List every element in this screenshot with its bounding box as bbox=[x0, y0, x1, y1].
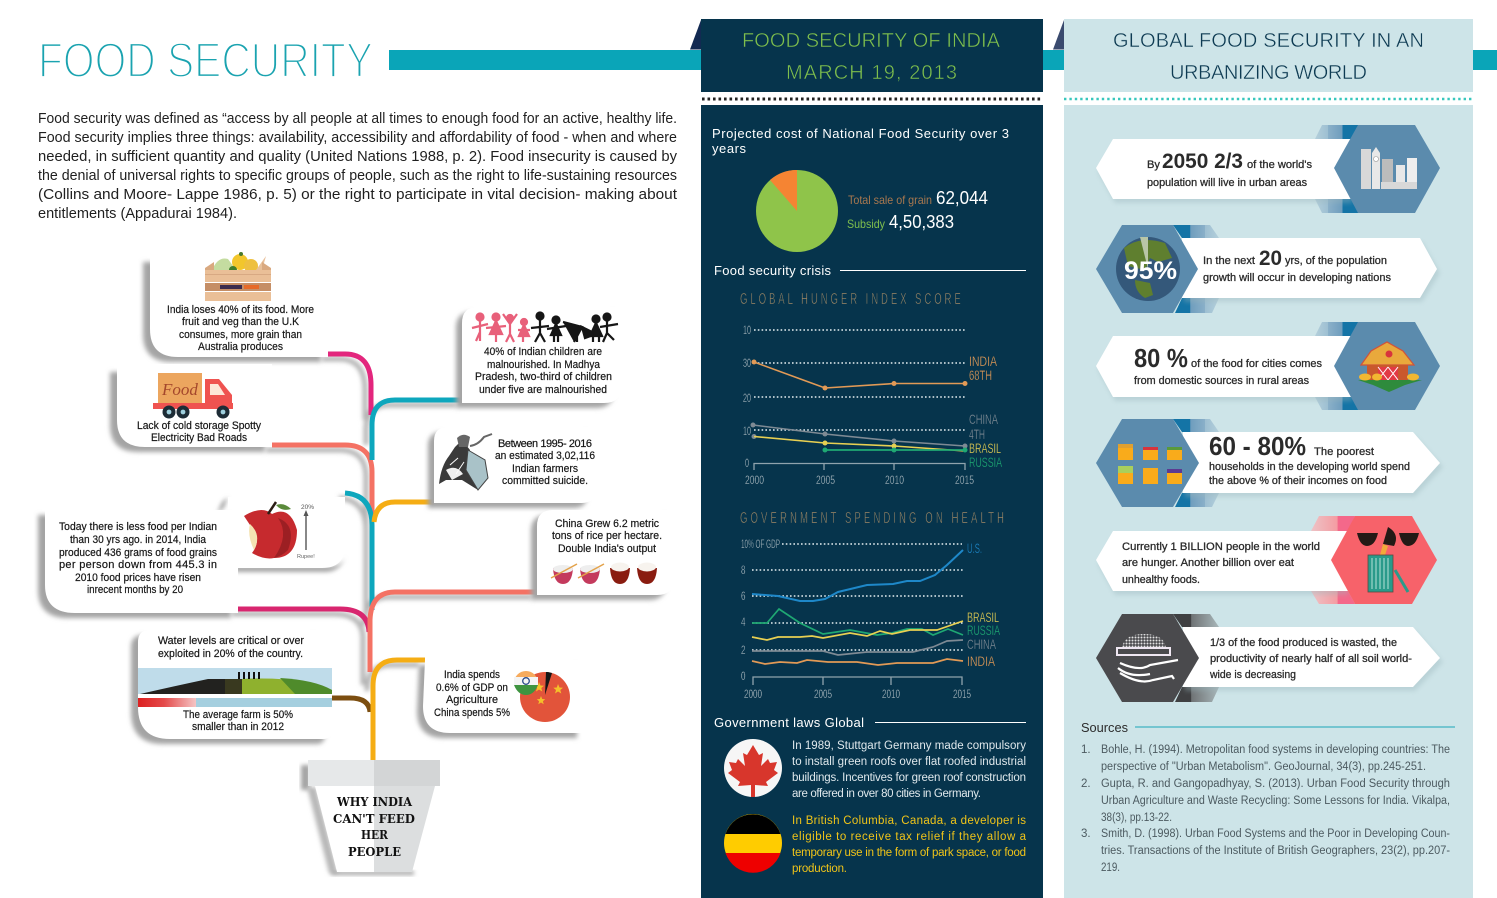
card: water levels: The average farm is 50% bbox=[183, 709, 293, 721]
card: farmer suicides: Between 1995- 2016 bbox=[498, 438, 592, 450]
row: income on food bbox=[1096, 419, 1443, 507]
chart: global hunger index score: 2005 bbox=[816, 473, 835, 487]
card: food loss: India loses 40% of its food. More bbox=[167, 304, 314, 316]
row: urban population: of the world's bbox=[1247, 159, 1312, 171]
row: developing nations: growth will occur in developing nations bbox=[1203, 272, 1391, 284]
pot: why India can't feed her people bbox=[301, 760, 440, 875]
card: water levels: smaller than in 2012 bbox=[192, 721, 284, 733]
chart: global hunger index score: 10 bbox=[743, 424, 751, 438]
text: British Columbia: In British Columbia, Canada, a developer is bbox=[792, 815, 1026, 827]
text: Stuttgart: In 1989, Stuttgart Germany made compulsory bbox=[792, 740, 1026, 752]
chart: global hunger index score: 2015 bbox=[955, 473, 974, 487]
card: agriculture GDP: Agriculture bbox=[446, 694, 498, 706]
card: malnourished children: malnourished. In Madhya bbox=[487, 359, 601, 371]
sources: Urban Agriculture and Waste Recycling: Some Lessons for India. Vikalpa, bbox=[1101, 795, 1450, 807]
chart: government spending on health: 0 bbox=[741, 669, 746, 683]
icon: apple bbox=[244, 502, 297, 558]
rupee arrow: Rupee! bbox=[297, 554, 315, 560]
title accent bar bbox=[389, 50, 701, 70]
pot: why India can't feed her people: WHY INDIA bbox=[336, 795, 413, 809]
card: China rice bbox=[531, 510, 674, 600]
text: Stuttgart: are offered in over 80 cities in Germany. bbox=[792, 788, 981, 800]
section heading: food security crisis: Food security crisis bbox=[714, 263, 832, 278]
card: water levels: Water levels are critical or over bbox=[158, 635, 304, 647]
row: one billion hungry bbox=[1096, 516, 1437, 604]
chart: global hunger index score: 2010 bbox=[885, 473, 904, 487]
text: Stuttgart: buildings. Incentives for green roof construction bbox=[792, 772, 1026, 784]
chart: global hunger index score: RUSSIA bbox=[969, 454, 1002, 470]
card: water levels: exploited in 20% of the country. bbox=[158, 648, 303, 660]
icon: baskets bbox=[1118, 444, 1182, 484]
card: cold storage: Lack of cold storage Spotty bbox=[137, 420, 261, 432]
row: income on food: 60 - 80% bbox=[1209, 431, 1306, 461]
card: China rice: Double India's output bbox=[558, 543, 656, 555]
icon: crate of vegetables bbox=[205, 252, 271, 301]
icon: farmer bbox=[439, 434, 492, 490]
chart: global hunger index score: 10 bbox=[743, 323, 751, 337]
card: less food per Indian: per person down from 445.3 in bbox=[59, 559, 217, 571]
text: Stuttgart: to install green roofs over flat roofed industrial bbox=[792, 756, 1026, 768]
icon: rice bowls bbox=[551, 562, 657, 584]
pie chart section bbox=[712, 126, 1009, 252]
row: food wasted: productivity of nearly half of all soil world- bbox=[1210, 653, 1412, 665]
pie chart section: 62,044 bbox=[936, 187, 988, 208]
icon: globe 95%: 95% bbox=[1124, 257, 1177, 285]
icon: barn bbox=[1358, 342, 1422, 392]
row: one billion hungry: Currently 1 BILLION people in the world bbox=[1122, 541, 1320, 553]
chart: government spending on health: GOVERNMENT SPENDING ON HEALTH bbox=[740, 508, 1004, 527]
panel heading: MARCH 19, 2013 bbox=[786, 62, 957, 84]
tree branches bbox=[232, 354, 537, 760]
chart: government spending on health: 2000 bbox=[744, 687, 762, 701]
row: urban population: population will live in urban areas bbox=[1147, 177, 1307, 189]
sources bbox=[1081, 720, 1455, 874]
sources: tries. Transactions of the Institute of British Geographers, 23(2), pp.207- bbox=[1101, 845, 1450, 857]
chart: government spending on health: CHINA bbox=[967, 636, 996, 652]
landscape illustration bbox=[138, 668, 332, 707]
row: developing nations bbox=[1096, 225, 1440, 313]
icon: bowl and hand bbox=[1117, 634, 1178, 681]
chart: government spending on health: U.S. bbox=[967, 540, 982, 556]
card: less food per Indian bbox=[38, 510, 238, 618]
icon: food into bin bbox=[1357, 527, 1419, 592]
chart: government spending on health bbox=[740, 508, 1004, 701]
chart: global hunger index score: INDIA bbox=[969, 353, 997, 369]
chart: government spending on health: 8 bbox=[741, 563, 746, 577]
card: China rice: tons of rice per hectare. bbox=[552, 530, 662, 542]
card: malnourished children: Pradesh, two-third of children bbox=[475, 371, 612, 383]
panel heading: FOOD SECURITY OF INDIA bbox=[742, 30, 1001, 52]
title: FOOD SECURITY bbox=[38, 34, 373, 88]
row: domestic sources bbox=[1096, 322, 1440, 410]
pie chart section: Projected cost of National Food Security over 3 bbox=[712, 126, 1009, 141]
icon: Canada flag bbox=[724, 739, 782, 797]
card: agriculture GDP: India spends bbox=[444, 669, 500, 681]
pot: why India can't feed her people: CAN'T FEED bbox=[333, 812, 415, 826]
card: farmer suicides: an estimated 3,02,116 bbox=[495, 450, 595, 462]
icon: children silhouettes bbox=[472, 312, 618, 342]
chart: global hunger index score: 2000 bbox=[745, 473, 764, 487]
intro paragraph: Food security was defined as “access by all people at all times to enough food for an active, healthy life. bbox=[38, 111, 677, 127]
chart: global hunger index score: 68TH bbox=[969, 367, 992, 383]
card: malnourished children: 40% of Indian children are bbox=[484, 346, 602, 358]
chart: global hunger index score: BRASIL bbox=[969, 440, 1001, 456]
row: domestic sources: from domestic sources in rural areas bbox=[1134, 375, 1309, 387]
card: farmer suicides: Indian farmers bbox=[512, 463, 578, 475]
row: income on food: The poorest bbox=[1314, 446, 1374, 458]
card: less food per Indian: 2010 food prices have risen bbox=[75, 572, 201, 584]
section heading: government laws global: Government laws Global bbox=[714, 715, 864, 730]
intro paragraph: Food security implies three things: availability, accessibility and affordability of food - when and where bbox=[38, 130, 677, 146]
sources: 3. bbox=[1081, 828, 1091, 840]
card: water levels bbox=[131, 630, 332, 744]
text: British Columbia: temporary use in the form of park space, or food bbox=[792, 847, 1026, 859]
row: urban population: 2050 2/3 bbox=[1162, 150, 1243, 173]
row: urban population bbox=[1096, 125, 1440, 213]
row: developing nations: yrs, of the population bbox=[1285, 255, 1387, 267]
sources: perspective of "Urban Metabolism". GeoJournal, 34(3), pp.245-251. bbox=[1101, 761, 1426, 773]
chart: government spending on health: INDIA bbox=[967, 653, 995, 669]
card: China rice: China Grew 6.2 metric bbox=[555, 518, 659, 530]
chart: government spending on health: 2005 bbox=[814, 687, 832, 701]
icon: food truck bbox=[153, 373, 233, 418]
card: agriculture GDP bbox=[417, 660, 585, 738]
row: one billion hungry: are hunger. Another billion over eat bbox=[1122, 557, 1294, 569]
card: cold storage: Electricity Bad Roads bbox=[151, 432, 247, 444]
chart: government spending on health: RUSSIA bbox=[967, 622, 1000, 638]
chart: government spending on health: 4 bbox=[741, 615, 746, 629]
sources: 1. bbox=[1081, 744, 1091, 756]
intro paragraph bbox=[38, 111, 678, 222]
card: farmer suicides bbox=[428, 427, 595, 508]
row: domestic sources: 80 % bbox=[1134, 343, 1188, 373]
intro paragraph: entitlements (Appadurai 1984). bbox=[38, 206, 237, 222]
card: cold storage bbox=[110, 364, 272, 452]
row: income on food: the above % of their incomes on food bbox=[1209, 475, 1387, 487]
card: apple price bbox=[217, 497, 346, 572]
icon: Germany flag bbox=[724, 814, 782, 873]
panel connector accents bbox=[690, 20, 1497, 70]
icon: food truck: Food bbox=[161, 380, 198, 399]
chart: government spending on health: 2010 bbox=[882, 687, 900, 701]
card: agriculture GDP: 0.6% of GDP on bbox=[436, 682, 508, 694]
row: developing nations: 20 bbox=[1259, 247, 1282, 270]
chart: government spending on health: 10% OF GDP bbox=[741, 537, 780, 551]
pie chart section: Total sale of grain bbox=[848, 193, 932, 207]
panel heading bbox=[742, 30, 1001, 84]
icon: city skyline bbox=[1361, 147, 1417, 189]
icon: globe 95% bbox=[1116, 237, 1180, 301]
chart: government spending on health: 6 bbox=[741, 589, 746, 603]
pot: why India can't feed her people: HER bbox=[361, 828, 389, 842]
pie chart section: years bbox=[712, 141, 746, 156]
sources: 219. bbox=[1101, 862, 1120, 874]
row: income on food: households in the developing world spend bbox=[1209, 461, 1410, 473]
chart: global hunger index score bbox=[740, 289, 1002, 487]
pie chart section: 4,50,383 bbox=[889, 211, 954, 232]
chart: government spending on health: 2015 bbox=[953, 687, 971, 701]
intro paragraph: the denial of universal rights to specific groups of people, such as the right to life-sustaining resources bbox=[38, 168, 677, 184]
card: food loss: fruit and veg than the U.K bbox=[182, 316, 300, 328]
card: food loss bbox=[143, 250, 328, 362]
rupee arrow bbox=[297, 504, 315, 560]
chart: global hunger index score: 20 bbox=[743, 391, 751, 405]
text: Stuttgart bbox=[792, 740, 1026, 800]
card: food loss: consumes, more grain than bbox=[179, 329, 302, 341]
intro paragraph: (Collins and Moore- Lappe 1986, p. 5) or the right to participate in vital decision- making about bbox=[38, 187, 677, 203]
chart: government spending on health: BRASIL bbox=[967, 609, 999, 625]
chart: global hunger index score: GLOBAL HUNGER INDEX SCORE bbox=[740, 289, 961, 308]
chart: global hunger index score: 4TH bbox=[969, 426, 985, 442]
row: food wasted: 1/3 of the food produced is wasted, the bbox=[1210, 637, 1397, 649]
sources: 2. bbox=[1081, 778, 1091, 790]
text: British Columbia bbox=[792, 815, 1027, 875]
text: British Columbia: production. bbox=[792, 863, 847, 875]
intro paragraph: needed, in sufficient quantity and quality (United Nations 1988, p. 2). Food insecurity is caused by bbox=[38, 149, 678, 165]
pie chart section: Subsidy bbox=[847, 217, 885, 231]
card: less food per Indian: produced 436 grams of food grains bbox=[59, 547, 217, 559]
rupee arrow: 20% bbox=[301, 504, 314, 511]
sources: Smith, D. (1998). Urban Food Systems and the Poor in Developing Coun- bbox=[1101, 828, 1450, 840]
chart: government spending on health: 2 bbox=[741, 643, 746, 657]
chart: global hunger index score: 30 bbox=[743, 356, 751, 370]
row: developing nations: In the next bbox=[1203, 255, 1255, 267]
row: one billion hungry: unhealthy foods. bbox=[1122, 574, 1200, 586]
row: domestic sources: of the food for cities comes bbox=[1191, 358, 1322, 370]
sources: Gupta, R. and Gangopadhyay, S. (2013). Urban Food Security through bbox=[1101, 778, 1450, 790]
card: farmer suicides: committed suicide. bbox=[502, 475, 588, 487]
card: less food per Indian: Today there is less food per Indian bbox=[59, 521, 217, 533]
panel: global food security bbox=[1064, 19, 1473, 898]
row: food wasted: wide is decreasing bbox=[1209, 669, 1296, 681]
card: food loss: Australia produces bbox=[198, 341, 283, 353]
pot: why India can't feed her people: PEOPLE bbox=[348, 845, 401, 859]
chart: global hunger index score: 0 bbox=[745, 456, 749, 470]
card: less food per Indian: inrecent months by 20 bbox=[87, 584, 183, 596]
card: agriculture GDP: China spends 5% bbox=[434, 707, 510, 719]
panel: food security of India bbox=[701, 19, 1043, 898]
row: food wasted bbox=[1096, 614, 1443, 702]
card: malnourished children: under five are malnourished bbox=[479, 384, 607, 396]
card: malnourished children bbox=[456, 307, 622, 408]
panel heading: GLOBAL FOOD SECURITY IN AN bbox=[1113, 30, 1424, 52]
sources: Sources bbox=[1081, 720, 1128, 735]
panel heading bbox=[1113, 30, 1424, 84]
card: less food per Indian: than 30 yrs ago. in 2014, India bbox=[70, 534, 207, 546]
text: British Columbia: eligible to receive tax relief if they allow a bbox=[792, 831, 1027, 843]
sources: Bohle, H. (1994). Metropolitan food systems in developing countries: The bbox=[1101, 744, 1450, 756]
sources: 38(3), pp.13-22. bbox=[1101, 812, 1172, 824]
chart: global hunger index score: CHINA bbox=[969, 411, 998, 427]
row: urban population: By bbox=[1147, 159, 1160, 171]
panel heading: URBANIZING WORLD bbox=[1170, 62, 1367, 84]
icon: China vs India pie bbox=[514, 671, 570, 722]
